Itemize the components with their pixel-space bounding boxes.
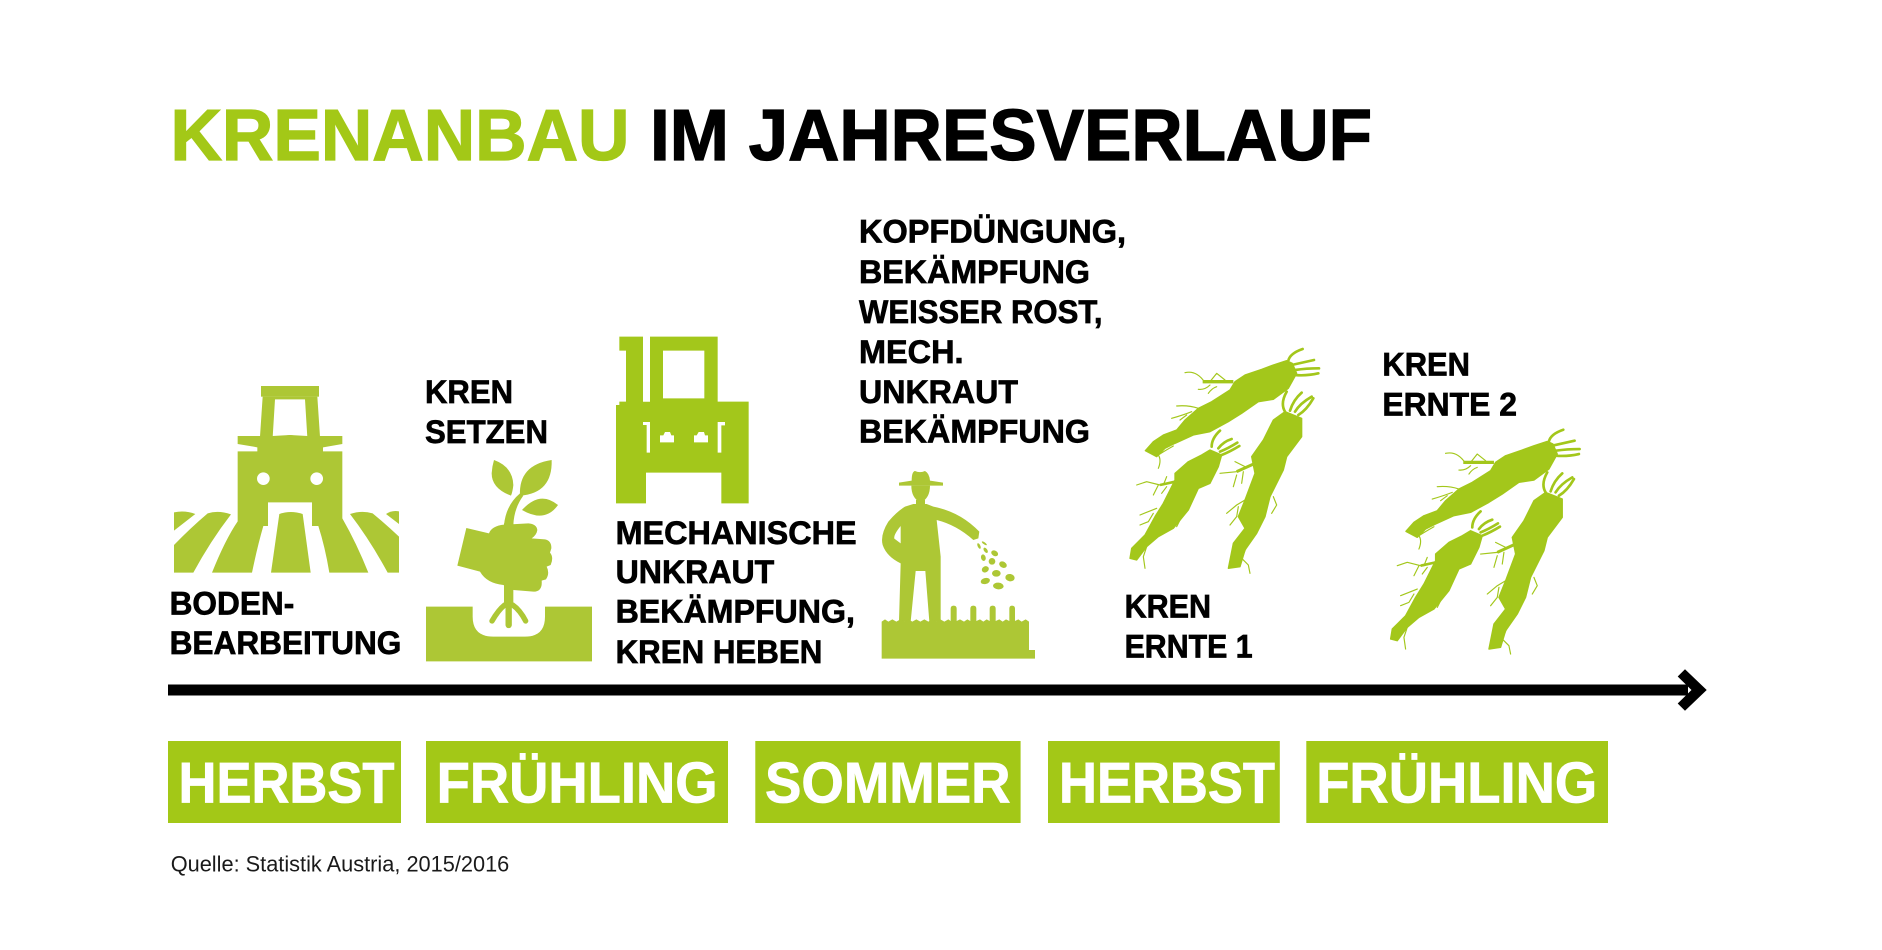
title bbox=[170, 95, 1372, 176]
icon: hand planting seedling bbox=[426, 460, 592, 661]
label: Kopfduengung: UNKRAUT bbox=[859, 373, 1018, 410]
label: mechanische Unkrautbekaempfung: MECHANISCHE bbox=[616, 514, 857, 551]
source note: Quelle: Statistik Austria, 2015/2016 bbox=[171, 852, 509, 877]
season: Sommer: SOMMER bbox=[765, 751, 1010, 815]
icon: horseradish roots bbox=[1391, 430, 1580, 654]
label: mechanische Unkrautbekaempfung: UNKRAUT bbox=[616, 553, 774, 590]
season: Fruehling: FRÜHLING bbox=[437, 751, 718, 815]
label: Kren Ernte 2 bbox=[1382, 346, 1517, 423]
panel: Kren Ernte 1 bbox=[1125, 349, 1319, 664]
label: Kopfduengung: KOPFDÜNGUNG, bbox=[859, 212, 1126, 249]
icon: tractor rear view bbox=[616, 337, 749, 503]
label: Kren Ernte 1: ERNTE 1 bbox=[1125, 627, 1253, 664]
label: mechanische Unkrautbekaempfung bbox=[616, 514, 857, 670]
season bar bbox=[168, 741, 1608, 823]
label: Kopfduengung: MECH. bbox=[859, 333, 964, 370]
title: IM JAHRESVERLAUF bbox=[650, 95, 1372, 176]
label: Bodenbearbeitung bbox=[170, 585, 401, 661]
title: KRENANBAU bbox=[170, 95, 630, 176]
label: Kopfduengung: WEISSER ROST, bbox=[859, 293, 1102, 330]
label: Kren setzen bbox=[425, 373, 548, 450]
label: Kren setzen: KREN bbox=[425, 373, 513, 410]
label: Kren setzen: SETZEN bbox=[425, 413, 548, 450]
label: Kren Ernte 2: KREN bbox=[1382, 346, 1470, 383]
panel: Kopfduengung bbox=[859, 212, 1126, 659]
label: Kren Ernte 1 bbox=[1125, 587, 1253, 664]
label: mechanische Unkrautbekaempfung: KREN HEBEN bbox=[616, 633, 822, 670]
season: Herbst: HERBST bbox=[178, 751, 394, 815]
label: mechanische Unkrautbekaempfung: BEKÄMPFUNG, bbox=[616, 593, 855, 630]
panel: Kren Ernte 2 bbox=[1382, 346, 1580, 654]
label: Bodenbearbeitung: BEARBEITUNG bbox=[170, 624, 401, 661]
label: Kren Ernte 2: ERNTE 2 bbox=[1382, 386, 1517, 423]
icon: horseradish roots bbox=[1130, 349, 1319, 573]
label: Kren Ernte 1: KREN bbox=[1125, 587, 1211, 624]
arrow: timeline bbox=[168, 669, 1707, 711]
panel: Kren setzen bbox=[425, 373, 592, 661]
season: Fruehling: FRÜHLING bbox=[1316, 751, 1597, 815]
label: Kopfduengung: BEKÄMPFUNG bbox=[859, 253, 1090, 290]
icon: tractor on field bbox=[174, 386, 399, 573]
label: Bodenbearbeitung: BODEN- bbox=[170, 585, 294, 622]
season: Herbst: HERBST bbox=[1059, 751, 1275, 815]
label: Kopfduengung: BEKÄMPFUNG bbox=[859, 412, 1090, 449]
panel: mechanische Unkrautbekaempfung bbox=[616, 337, 857, 670]
panel: Bodenbearbeitung bbox=[170, 386, 401, 661]
icon: farmer sowing bbox=[882, 471, 1035, 659]
label: Kopfduengung bbox=[859, 212, 1126, 449]
